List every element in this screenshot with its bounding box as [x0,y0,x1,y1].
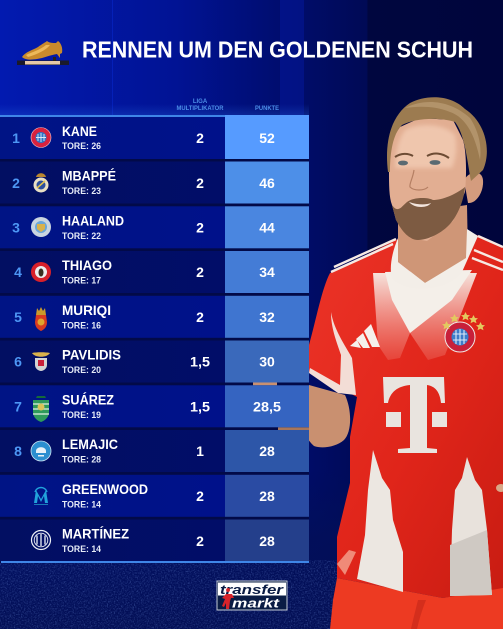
row 6: Pavlidis: 1,5 [190,354,210,370]
row 4: Thiago: TORE: 17 [62,276,101,286]
row 5: Muriqi: MURIQI [62,302,111,318]
eyes and brows [395,154,449,158]
row 2: Mbappé [0,162,309,204]
logo: Transfermarkt [217,581,287,610]
row 10: Martínez: 2 [196,533,204,549]
icon: Real Madrid crest [34,173,48,192]
row 8: Lemajic: 28 [259,443,275,459]
row 7: Suárez: 28,5 [253,398,281,414]
row 2: Mbappé: 2 [196,175,204,191]
row 1: Kane: 52 [259,130,275,146]
icon: Mallorca crest [35,307,47,331]
icon: Marseille crest [34,488,48,505]
row 2: Mbappé: 46 [259,175,275,191]
row 2: Mbappé: TORE: 23 [62,186,101,197]
row 7: Suárez [0,385,309,427]
row 7: Suárez: SUÁREZ [62,391,114,407]
row 3: Haaland: 2 [196,220,204,236]
row 7: Suárez: 1,5 [190,398,210,414]
row 3: Haaland: HAALAND [62,212,124,228]
icon: red footballer [222,588,234,609]
icon: Sporting crest [33,396,49,422]
jersey [309,232,503,598]
row 10: Martínez [0,520,309,562]
row 1: Kane: 2 [196,130,204,146]
icon: Manchester City crest [31,217,51,237]
sponsor T logo [383,377,447,453]
small hand at edge [496,484,503,492]
row 6: Pavlidis: 6 [14,354,22,370]
row 6: Pavlidis: TORE: 20 [62,365,101,376]
row 5: Muriqi: 5 [14,309,22,325]
row 1: Kane [0,117,309,159]
sleeve panel [309,312,356,395]
row 1: Kane: KANE [62,123,97,139]
row 6: Pavlidis: PAVLIDIS [62,346,121,362]
player photo [253,97,503,629]
row 5: Muriqi: 32 [259,309,275,325]
row 4: Thiago: 4 [14,264,22,280]
row 8: Lemajic [0,430,309,472]
row 8: Lemajic: 1 [196,443,204,459]
row 9: Greenwood: GREENWOOD [62,481,148,497]
row 10: Martínez: MARTÍNEZ [62,526,129,542]
ranking table [0,115,309,563]
row 10: Martínez: 28 [259,533,275,549]
hair [387,97,487,181]
row 5: Muriqi: TORE: 16 [62,320,101,331]
crest with stars [445,322,475,352]
table header: league multiplier [0,99,309,116]
shoulder stripes left [331,239,396,272]
row 1: Kane: TORE: 26 [62,141,101,152]
row 8: Lemajic: 8 [14,443,22,459]
icon: Inter crest [32,530,50,550]
neck [398,205,468,283]
row 1: Kane: 1 [12,130,20,146]
row 3: Haaland [0,206,309,248]
row 3: Haaland: TORE: 22 [62,231,101,242]
row 3: Haaland: 44 [259,220,275,236]
beard [392,187,465,240]
row 3: Haaland: 3 [12,220,20,236]
lower jersey stripes [357,450,403,592]
row 5: Muriqi: 2 [196,309,204,325]
row 9: Greenwood: 2 [196,488,204,504]
row 10: Martínez: TORE: 14 [62,544,102,555]
icon: Benfica crest [32,352,50,371]
row 7: Suárez: TORE: 19 [62,410,101,421]
icon: Bayern crest [31,128,51,148]
row 4: Thiago: THIAGO [62,257,112,273]
row 4: Thiago [0,251,309,293]
jersey chest pattern [373,273,477,360]
collar [391,229,478,289]
row 6: Pavlidis [0,340,309,382]
icon: golden shoe trophy [17,41,69,65]
face [389,118,466,241]
table header: league multiplier: LIGA [193,99,208,105]
icon: Lemajic club crest [31,441,51,461]
row 8: Lemajic: TORE: 28 [62,454,101,466]
hand [253,382,350,447]
row 9: Greenwood: TORE: 14 [62,499,102,510]
table header: league multiplier: MULTIPLIKATOR [176,106,224,112]
ear [464,172,483,203]
shorts [330,578,503,629]
adidas logo [350,324,380,348]
row 6: Pavlidis: 30 [259,354,275,370]
row 4: Thiago: 2 [196,264,204,280]
row 8: Lemajic: LEMAJIC [62,436,118,452]
logo: Transfermarkt: markt [232,596,280,610]
row 2: Mbappé: 2 [12,175,20,191]
shoulder stripes right [472,236,503,270]
title: RENNEN UM DEN GOLDENEN SCHUH [82,36,473,62]
row 4: Thiago: 34 [259,264,275,280]
row 2: Mbappé: MBAPPÉ [62,168,116,184]
row 9: Greenwood: 28 [259,488,275,504]
table header: points: PUNKTE [255,106,279,112]
row 7: Suárez: 7 [14,398,22,414]
row 9: Greenwood [0,475,309,517]
icon: Brentford crest [31,262,51,282]
logo: Transfermarkt: transfer [220,583,285,597]
row 5: Muriqi [0,296,309,338]
